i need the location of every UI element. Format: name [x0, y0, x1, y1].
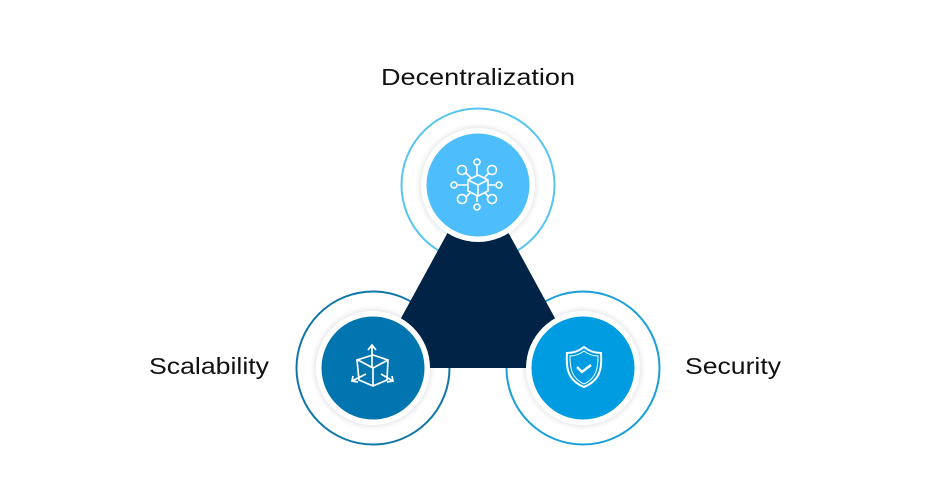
icon: network cube — [451, 159, 502, 210]
node: decentralization — [421, 128, 535, 242]
ring: scalability — [296, 292, 450, 444]
node: scalability — [316, 311, 430, 425]
ring: decentralization — [402, 108, 554, 262]
soft shadow: decentralization — [419, 126, 537, 244]
heading: Security: Security — [685, 353, 781, 379]
icon: shield check — [567, 347, 601, 387]
node: security — [526, 311, 640, 425]
soft shadow: scalability — [314, 309, 432, 427]
icon: expanding cube — [352, 345, 393, 386]
soft shadow: security — [524, 309, 642, 427]
heading: Decentralization: Decentralization — [381, 64, 575, 90]
central dark triangle — [400, 232, 556, 368]
heading: Scalability: Scalability — [149, 353, 269, 379]
ring: security — [506, 292, 660, 444]
